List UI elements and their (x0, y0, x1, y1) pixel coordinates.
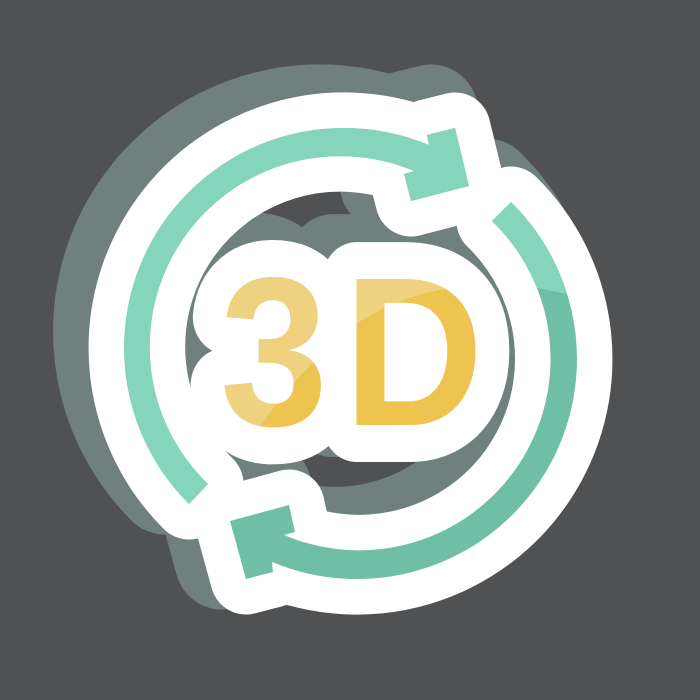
sticker drop shadow: 3 (196, 218, 304, 454)
3D label: D (344, 234, 484, 471)
glossy highlight overlay: D (344, 234, 484, 471)
white sticker outline: 3 (220, 234, 328, 471)
arrow: top clockwise arc (124, 128, 469, 504)
sticker drop shadow: D (320, 218, 460, 454)
white sticker outline (124, 128, 577, 579)
white sticker outline: D (344, 234, 484, 471)
arrow: bottom clockwise arc (230, 202, 577, 579)
3D label: 3 (220, 234, 328, 471)
3D label (220, 234, 484, 471)
glossy highlight overlay: 3 (220, 234, 328, 471)
sticker icon: 3D rotation (53, 64, 612, 615)
sticker drop shadow (100, 111, 553, 563)
glossy highlight overlay (124, 128, 567, 504)
